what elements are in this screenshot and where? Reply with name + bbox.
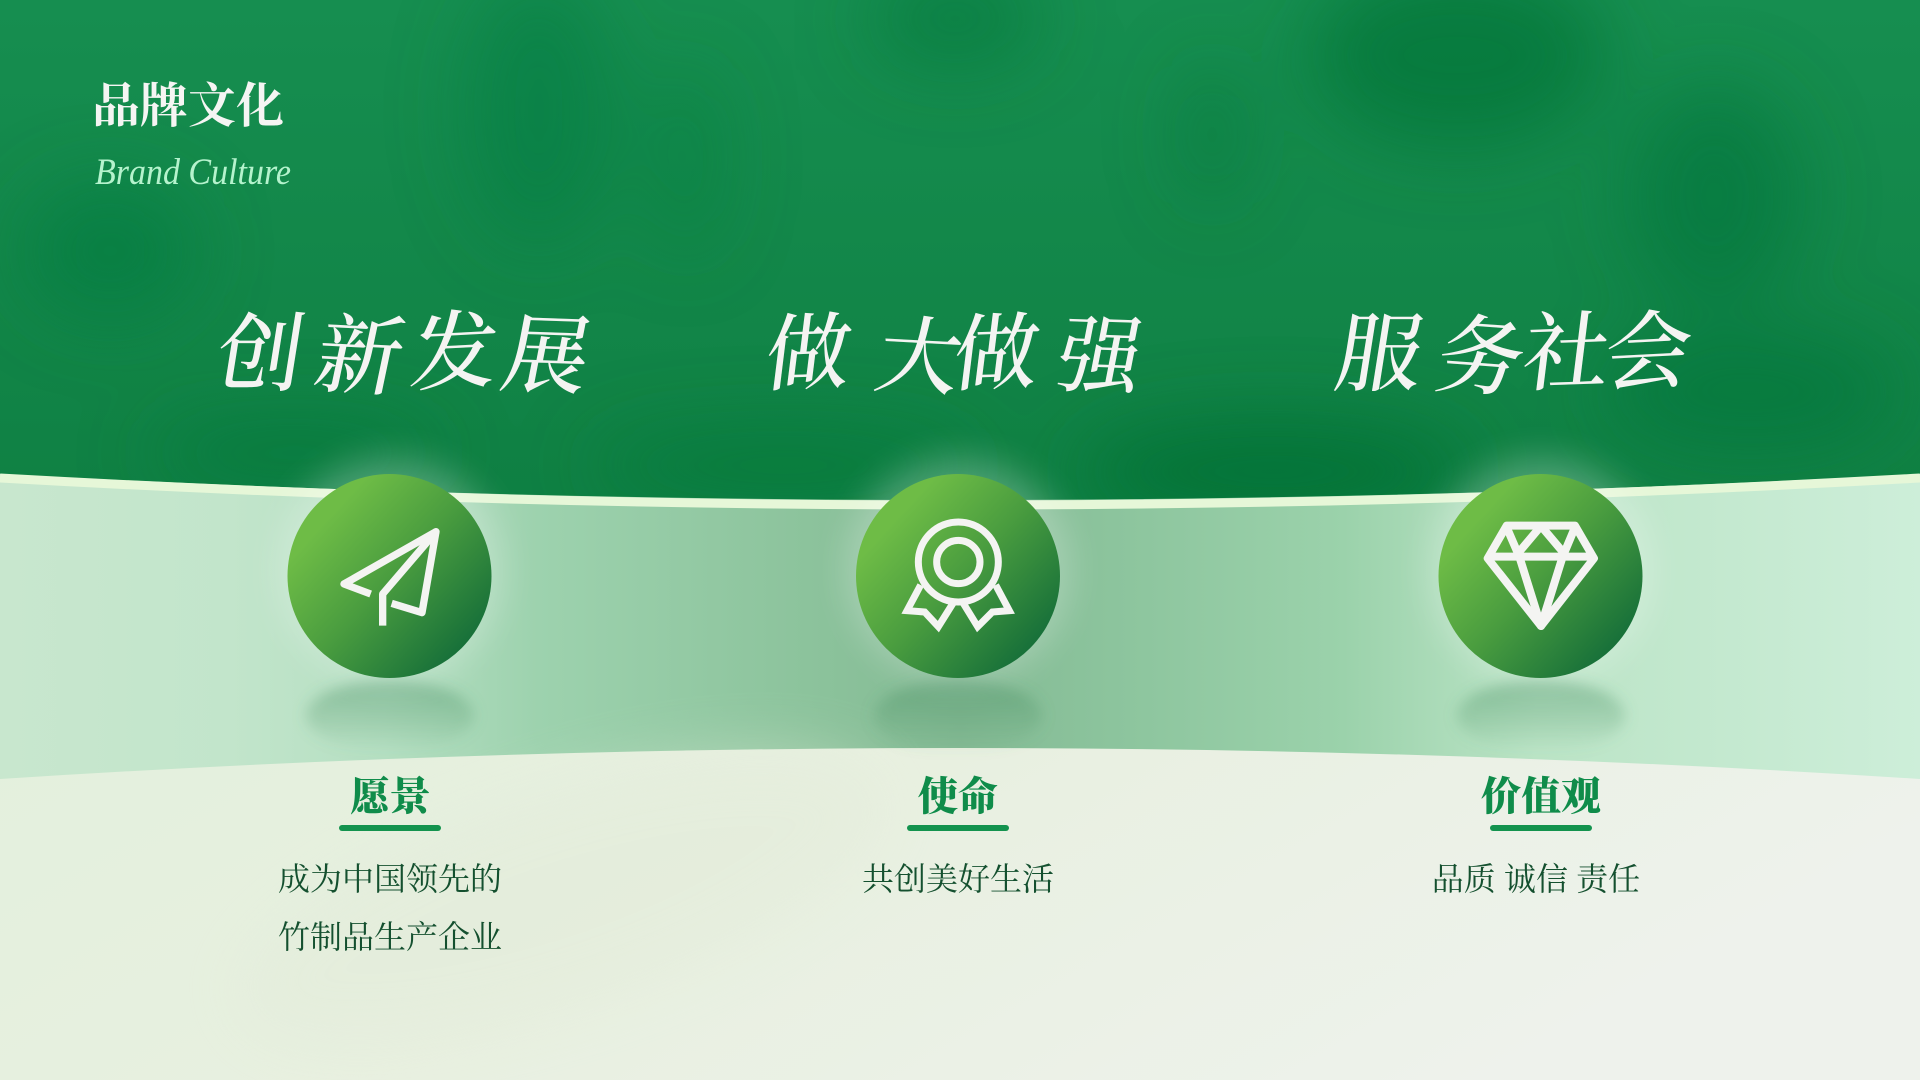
bottom pale panel: [0, 690, 1920, 1080]
curved cream divider line: [0, 478, 1920, 505]
title: 品牌文化: [92, 67, 284, 136]
slogan: 服务社会: 服务社会: [1327, 280, 1706, 415]
heading: 使命: 使命: [918, 765, 998, 822]
column: values: [1429, 458, 1653, 900]
heading: 愿景: 愿景: [350, 765, 432, 822]
glow: vision: [278, 458, 502, 682]
icon: diamond: [1488, 526, 1594, 626]
reflection: vision: [306, 680, 474, 752]
slogan: 创新发展: 创新发展: [208, 280, 604, 413]
icon: paper plane: [344, 531, 437, 626]
underline: [1490, 825, 1592, 831]
reflection: values: [1457, 680, 1625, 752]
slogan: 做大做强: 做大做强: [755, 286, 1159, 413]
subtitle: Brand Culture: [95, 152, 291, 193]
vision text: 竹制品生产企业: [278, 912, 502, 958]
circle: values: [1438, 474, 1642, 678]
underline: [339, 825, 441, 831]
mission text: 共创美好生活: [862, 854, 1054, 900]
middle light green band: [0, 474, 1920, 800]
column: mission: [846, 458, 1070, 900]
glow: mission: [846, 458, 1070, 682]
vision text: 成为中国领先的: [278, 854, 502, 900]
column: vision: [278, 458, 502, 958]
circle: vision: [288, 474, 492, 678]
green header background: [0, 0, 1920, 520]
circle: mission: [856, 474, 1060, 678]
underline: [907, 825, 1009, 831]
title: [92, 67, 291, 193]
values text: 品质 诚信 责任: [1432, 854, 1640, 900]
heading: 价值观: 价值观: [1481, 765, 1601, 822]
icon: medal: [907, 522, 1009, 627]
glow: values: [1429, 458, 1653, 682]
reflection: mission: [874, 680, 1042, 752]
